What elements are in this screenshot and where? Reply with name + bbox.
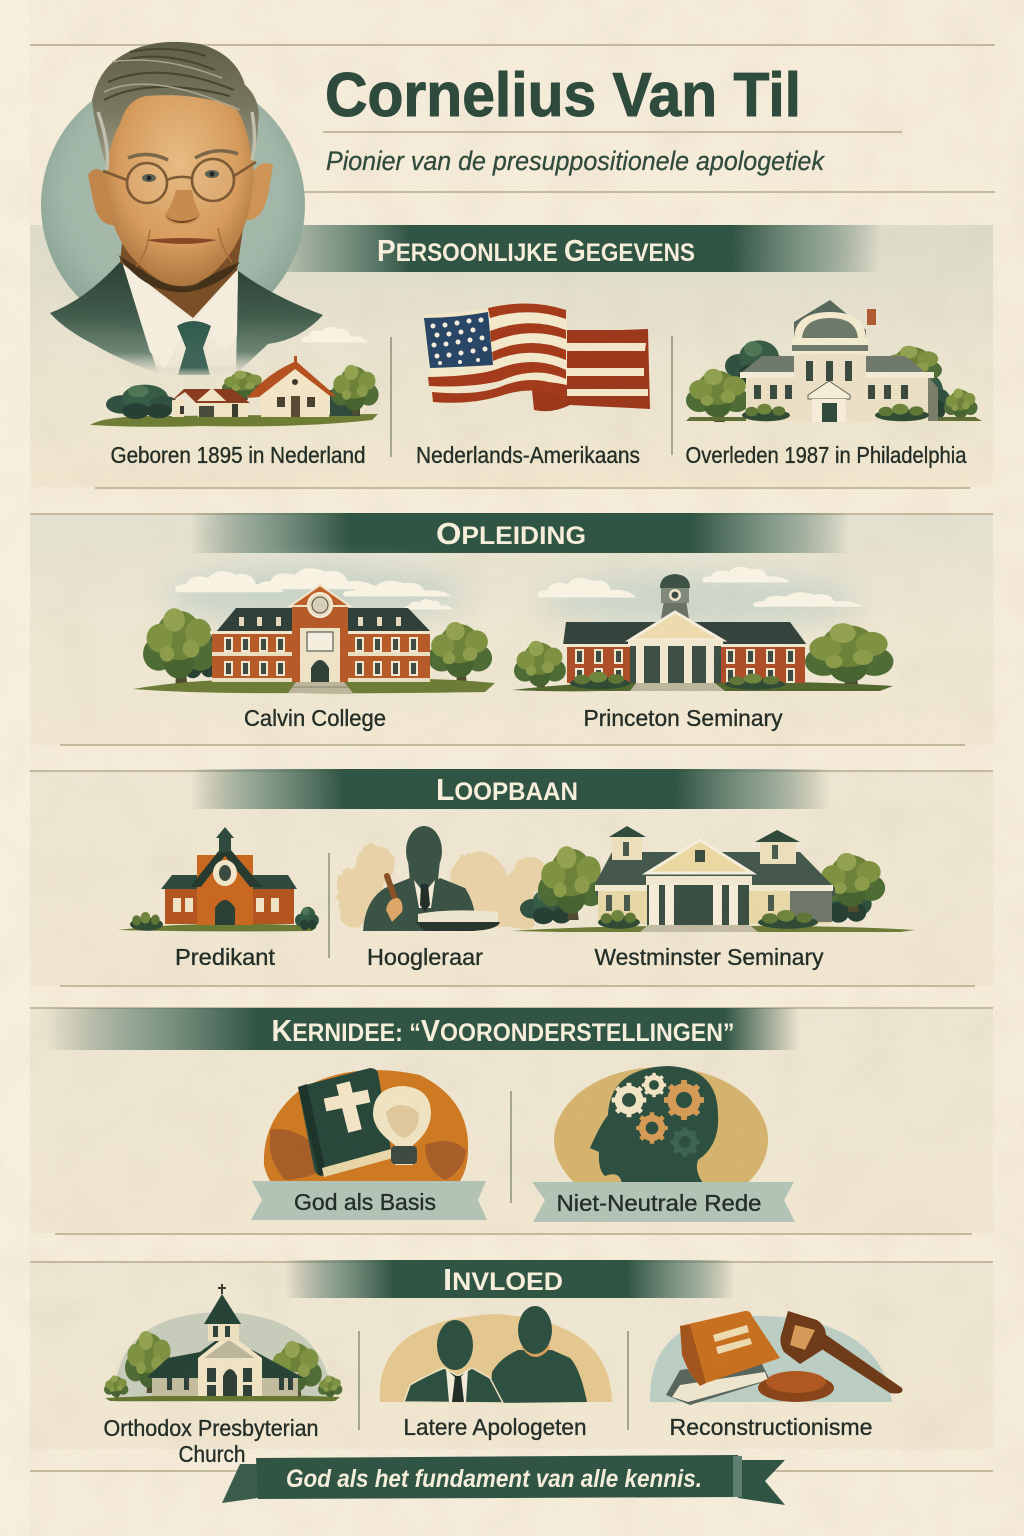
section banner: persoonlijke gegevens: PERSOONLIJKE GEGEVENS bbox=[377, 233, 695, 268]
caption: geboren: Geboren 1895 in Nederland bbox=[110, 442, 366, 468]
section banner: opleiding bbox=[190, 513, 850, 553]
title underline bbox=[323, 131, 902, 133]
panel: loopbaan bbox=[30, 771, 993, 986]
section banner: invloed: INVLOED bbox=[443, 1262, 563, 1297]
caption: predikant: Predikant bbox=[175, 944, 276, 970]
divider bbox=[391, 336, 672, 457]
ribbon: God als Basis bbox=[251, 1181, 487, 1220]
icon: Dutch farmhouses bbox=[90, 327, 379, 427]
section banner: kernidee bbox=[45, 1008, 800, 1050]
caption: orthodox presbyterian church: Orthodox Presbyterian bbox=[104, 1415, 318, 1441]
divider bbox=[510, 1091, 512, 1203]
caption: reconstructionisme: Reconstructionisme bbox=[670, 1414, 872, 1440]
panel: persoonlijke gegevens bbox=[30, 45, 995, 488]
icon: Calvin College bbox=[133, 567, 495, 693]
icon: book and gavel bbox=[650, 1311, 902, 1405]
section banner: loopbaan bbox=[190, 769, 830, 809]
portrait of Cornelius Van Til bbox=[41, 42, 323, 375]
caption: nationaliteit: Nederlands-Amerikaans bbox=[416, 442, 640, 468]
panel: kernidee bbox=[30, 1008, 993, 1234]
caption: latere apologeten: Latere Apologeten bbox=[404, 1414, 586, 1440]
caption: calvin college: Calvin College bbox=[244, 705, 386, 731]
caption: westminster seminary: Westminster Seminary bbox=[594, 944, 824, 970]
bottom ribbon: conclusion: God als het fundament van alle kennis. bbox=[286, 1465, 702, 1493]
icon: Bible and lightbulb bbox=[264, 1068, 468, 1184]
section banner: loopbaan: LOOPBAAN bbox=[436, 772, 578, 807]
divider bbox=[359, 1331, 628, 1430]
panel: opleiding bbox=[30, 514, 993, 745]
caption: orthodox presbyterian church: Church bbox=[178, 1441, 246, 1467]
icon: Orthodox Presbyterian Church bbox=[104, 1284, 342, 1402]
title: Cornelius Van Til bbox=[325, 61, 801, 130]
ribbon: Niet-Neutrale Rede: Niet-Neutrale Rede bbox=[556, 1190, 762, 1216]
panel: invloed bbox=[30, 1262, 993, 1471]
icon: later apologists silhouettes bbox=[380, 1306, 612, 1403]
icon: Predikant church bbox=[118, 827, 319, 931]
icon: Hoogleraar silhouette bbox=[336, 826, 548, 931]
icon: Princeton Seminary bbox=[512, 567, 893, 691]
section banner: invloed bbox=[285, 1260, 735, 1298]
icon: American flag bbox=[423, 303, 650, 411]
icon: Philadelphia house bbox=[686, 300, 982, 422]
section banner: kernidee: KERNIDEE: “VOORONDERSTELLINGEN” bbox=[272, 1013, 734, 1048]
section banner: persoonlijke gegevens bbox=[262, 225, 880, 272]
bottom ribbon: conclusion bbox=[222, 1455, 785, 1505]
caption: hoogleraar: Hoogleraar bbox=[367, 944, 483, 970]
icon: head with gears bbox=[554, 1066, 768, 1213]
subtitle: Pionier van de presuppositionele apologetiek bbox=[326, 146, 825, 176]
section banner: opleiding: OPLEIDING bbox=[436, 516, 586, 551]
ribbon: Niet-Neutrale Rede bbox=[532, 1182, 795, 1222]
caption: orthodox presbyterian church bbox=[104, 1415, 318, 1467]
divider bbox=[328, 853, 330, 958]
caption: princeton seminary: Princeton Seminary bbox=[584, 705, 783, 731]
caption: overleden: Overleden 1987 in Philadelphia bbox=[686, 442, 967, 468]
ribbon: God als Basis: God als Basis bbox=[294, 1189, 436, 1215]
icon: Westminster Seminary bbox=[512, 826, 915, 932]
